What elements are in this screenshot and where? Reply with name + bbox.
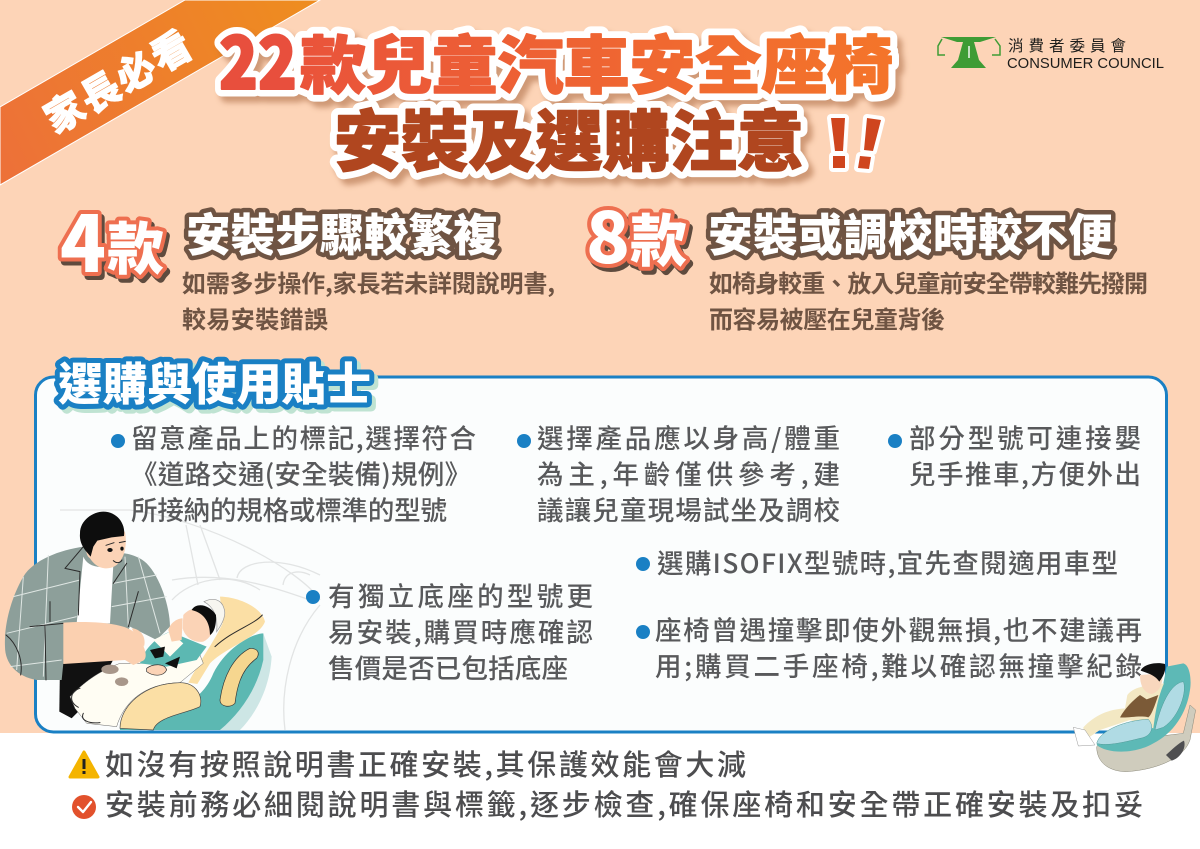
panel: tips <box>36 377 1166 732</box>
title <box>219 5 898 191</box>
tip: 選擇產品應以身高/體重: 議讓兒童現場試坐及調校 <box>537 489 840 528</box>
title: 22 <box>219 5 297 110</box>
text: 4款 description: 較易安裝錯誤 <box>182 300 328 335</box>
tip: 選購ISOFIX型號時: 選購ISOFIX型號時,宜先查閱適用車型 <box>657 542 1118 581</box>
icon: green scale <box>938 37 1000 68</box>
tip: 部分型號可連接嬰兒手推車: 兒手推車,方便外出 <box>909 453 1141 492</box>
text: reminder: 安裝前務必細閱說明書與標籤,逐步檢查,確保座椅和安全帶正確安裝及扣妥 <box>105 782 1143 824</box>
heading tab: 選購與使用貼士: 選購與使用貼士 <box>62 352 375 417</box>
text: 8款 description: 而容易被壓在兒童背後 <box>709 300 945 335</box>
text: 4款 description <box>182 264 555 335</box>
icon: warning triangle <box>70 752 98 777</box>
stat: 8款: 8 <box>589 187 633 288</box>
heading: 安裝或調校時較不便: 安裝或調校時較不便 <box>708 199 1113 264</box>
tip: 留意產品上的標記: 《道路交通(安全裝備)規例》 <box>131 453 471 492</box>
corner banner <box>0 0 320 185</box>
bottom white band <box>0 733 1200 849</box>
stat: 4款: 款 <box>110 208 167 290</box>
tip: 有獨立底座的型號: 有獨立底座的型號更 <box>328 575 593 614</box>
background seat line art <box>60 510 320 730</box>
tip: 選擇產品應以身高/體重 <box>517 417 840 528</box>
icon: check circle <box>72 795 96 819</box>
stat: 8款: 款 <box>633 200 690 282</box>
tip: 座椅曾遇撞擊 <box>636 609 1142 684</box>
tip: 留意產品上的標記: 所接納的規格或標準的型號 <box>131 489 447 528</box>
title: 款兒童汽車安全座椅 <box>305 22 898 113</box>
title: 22 <box>224 11 302 116</box>
tip: 留意產品上的標記: 留意產品上的標記,選擇符合 <box>131 417 476 456</box>
tip: 部分型號可連接嬰兒手推車 <box>888 417 1141 492</box>
stat: 8款 <box>586 183 690 288</box>
tip: 有獨立底座的型號: 售價是否已包括底座 <box>328 647 568 686</box>
stat: 4款: 款 <box>107 204 164 286</box>
tip: 有獨立底座的型號: 易安裝,購買時應確認 <box>328 611 593 650</box>
corner banner: 家長必看 <box>33 16 201 145</box>
title: 款兒童汽車安全座椅 <box>300 16 893 107</box>
tip: 部分型號可連接嬰兒手推車: 部分型號可連接嬰 <box>909 417 1141 456</box>
title: 安裝及選購注意 <box>334 89 804 185</box>
tip: 有獨立底座的型號 <box>306 575 593 686</box>
text: warning: 如沒有按照說明書正確安裝,其保護效能會大減 <box>105 742 746 784</box>
text: 8款 description: 如椅身較重、放入兒童前安全帶較難先撥開 <box>709 264 1148 299</box>
logo: consumer council <box>938 34 1164 72</box>
title: 安裝及選購注意 <box>334 89 804 185</box>
text: 4款 description: 如需多步操作,家長若未詳閱說明書, <box>182 264 555 299</box>
heading tab: 選購與使用貼士: 選購與使用貼士 <box>58 348 371 413</box>
illustration: father and baby in car seat <box>5 512 272 730</box>
tip: 座椅曾遇撞擊: 座椅曾遇撞擊即使外觀無損,也不建議再 <box>655 609 1142 648</box>
stat: 8款: 8 <box>586 183 630 284</box>
text: 8款 description <box>709 264 1148 335</box>
title: 22 <box>219 5 297 110</box>
tip: 座椅曾遇撞擊: 用;購買二手座椅,難以確認無撞擊紀錄 <box>655 645 1142 684</box>
logo: consumer council: 消費者委員會 <box>1008 34 1126 56</box>
illustration: child in car seat <box>1073 663 1196 772</box>
stat: 8款: 款 <box>630 196 687 278</box>
title: 安裝及選購注意 <box>339 95 809 191</box>
tip: 留意產品上的標記 <box>111 417 476 528</box>
tip: 選擇產品應以身高/體重: 為主,年齡僅供參考,建 <box>537 453 840 492</box>
tip: 選擇產品應以身高/體重: 選擇產品應以身高/體重 <box>537 417 840 456</box>
stat: 4款 <box>60 183 167 299</box>
heading: 安裝步驟較繁複: 安裝步驟較繁複 <box>186 199 498 264</box>
stat: 4款: 4 <box>60 183 106 295</box>
logo: consumer council: CONSUMER COUNCIL <box>1007 55 1164 72</box>
stat: 4款: 4 <box>63 187 109 299</box>
title: 款兒童汽車安全座椅 <box>300 16 893 107</box>
